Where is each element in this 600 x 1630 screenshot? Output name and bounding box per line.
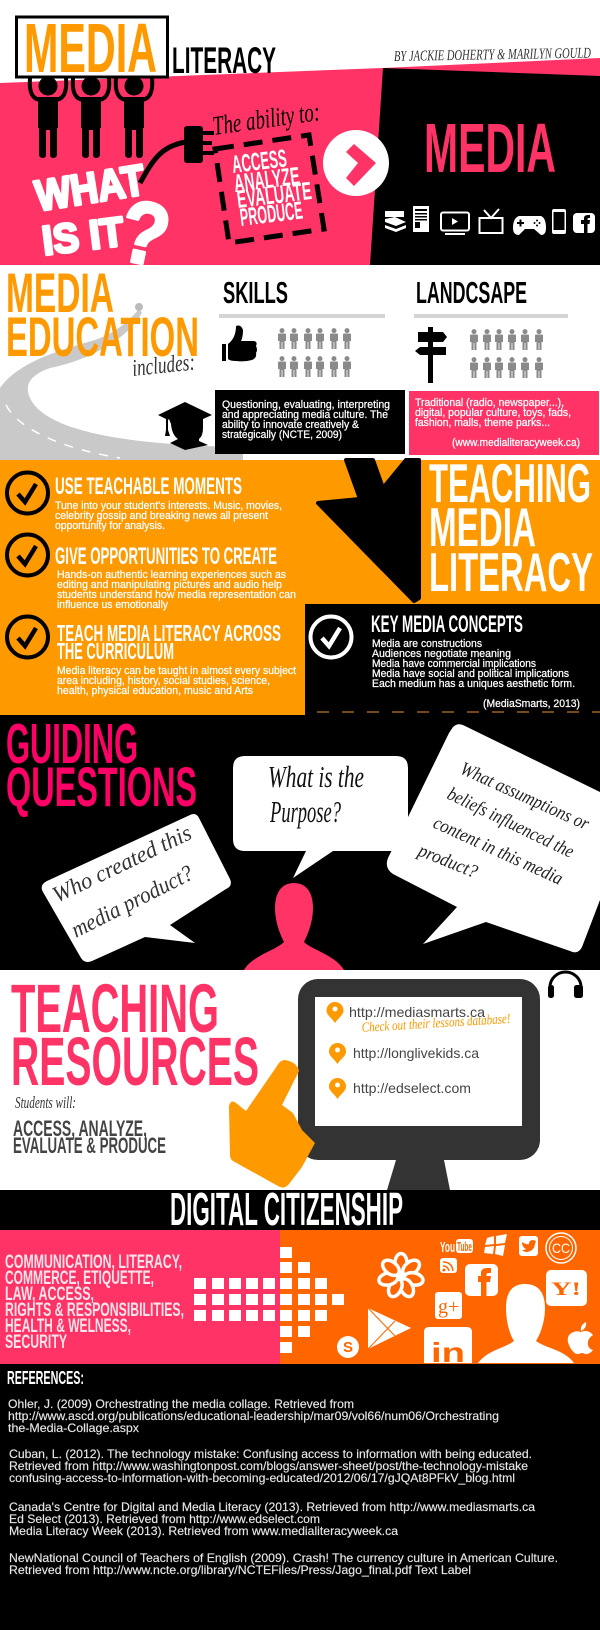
- reference: Cuban: Retrieved from http://www.washingtonpost.com/blogs/answer-sheet/post/the-technology-mistake: [9, 1459, 528, 1473]
- tip: opportunities to create: editing and manipulating pictures and audio help: [57, 579, 282, 591]
- icon: windows: [484, 1234, 507, 1256]
- panel: media education: [0, 261, 600, 460]
- black media panel: [370, 68, 600, 265]
- text box: skills: ability to innovate creatively &: [222, 419, 360, 431]
- text box: skills: strategically (NCTE, 2009): [222, 429, 342, 441]
- panel: key media concepts: (MediaSmarts, 2013): [483, 698, 580, 710]
- tip: opportunities to create: influence us emotionally: [57, 599, 168, 611]
- reference: NCTE: Retrieved from http://www.ncte.org/library/NCTEFiles/Press/Jago_final.pdf Text Label: [9, 1563, 471, 1577]
- panel: teaching resources: [0, 970, 600, 1190]
- icon: landscape people: [470, 329, 543, 378]
- heading: what is it: WHAT: [32, 156, 148, 221]
- heading: media education: [6, 261, 199, 368]
- title: literacy: LITERACY: [172, 40, 276, 81]
- speech bubble: purpose: Purpose?: [269, 794, 341, 829]
- icon: check 1: [7, 472, 48, 514]
- panel: key media concepts: [305, 604, 600, 715]
- text box: landscape: (www.medialiteracyweek.ca): [452, 437, 580, 449]
- heading: teaching media literacy: [429, 452, 593, 603]
- resource links: http://edselect.com: [353, 1080, 471, 1096]
- text: the ability to: The ability to:: [211, 96, 322, 141]
- text: elements list: RIGHTS & RESPONSIBILITIES,: [5, 1300, 184, 1321]
- heading: guiding questions: QUESTIONS: [6, 755, 197, 818]
- reference: Ohler: http://www.ascd.org/publications/educational-leadership/mar09/vol66/num06/Orchestrating: [8, 1409, 499, 1423]
- reference: Cuban: confusing-access-to-information-with-becoming-educated/2012/06/17/gJQAt8PFkV_blog.html: [9, 1471, 515, 1485]
- title: media box: [16, 9, 168, 87]
- road illustration: [0, 303, 243, 460]
- text: includes: includes:: [131, 350, 196, 382]
- reference: Canada and others: [9, 1500, 535, 1538]
- reference: Cuban: [9, 1447, 532, 1485]
- reference: Ohler: [8, 1397, 499, 1435]
- orange panel: [280, 1230, 600, 1364]
- icon: plug and cable: [140, 126, 214, 183]
- speech bubble: assumptions: [387, 724, 600, 952]
- tip: opportunities to create: GIVE OPPORTUNITIES TO CREATE: [55, 543, 277, 570]
- heading: teaching resources: RESOURCES: [11, 1023, 259, 1100]
- text: access analyze evaluate produce: ACCESS, ANALYZE,: [13, 1116, 147, 1141]
- speech bubble: assumptions: product?: [413, 839, 481, 883]
- dashed frame with verbs: EVALUATE: [235, 177, 313, 214]
- text: elements list: COMMERCE, ETIQUETTE,: [5, 1268, 154, 1289]
- panel: header: [0, 0, 600, 287]
- tip: opportunities to create: students understand how media representation can: [57, 589, 296, 601]
- icon: google plus: [435, 1292, 462, 1319]
- icon: signpost: [415, 327, 447, 383]
- icon: headphones: [548, 972, 583, 998]
- dashed frame with verbs: [215, 135, 324, 243]
- panel: references: [7, 1368, 558, 1577]
- text box: skills: and appreciating media culture. The: [222, 409, 388, 421]
- icon: rss: [440, 1258, 457, 1273]
- icon: pointing hand: [229, 1060, 315, 1188]
- icon: pink person: [244, 883, 344, 970]
- reference: Ohler: the-Media-Collage.aspx: [8, 1421, 139, 1435]
- icon: skype: [337, 1336, 359, 1358]
- text box: landscape: Traditional (radio, newspaper...),: [415, 397, 564, 409]
- reference: Canada and others: Canada's Centre for Digital and Media Literacy (2013). Retrieved from http://www.mediasmarts.ca: [9, 1500, 535, 1514]
- heading: references: REFERENCES:: [7, 1368, 84, 1388]
- text: elements list: [5, 1252, 184, 1353]
- icon: icq flower: [378, 1254, 424, 1299]
- text: students will: Students will:: [15, 1093, 76, 1112]
- arrow: [318, 460, 419, 601]
- icon: white check: [310, 616, 352, 658]
- icon row: media types: [385, 206, 595, 235]
- pink panel: [0, 1230, 280, 1364]
- tip: opportunities to create: Hands-on authentic learning experiences such as: [57, 569, 286, 581]
- icon: graduate: [158, 402, 212, 450]
- panel: key media concepts: Media have social and political implications: [372, 668, 569, 680]
- icon: yahoo: [546, 1270, 587, 1306]
- icon: youtube: You: [440, 1239, 455, 1256]
- arrow of squares: [194, 1247, 344, 1353]
- icon: twitter: [519, 1236, 538, 1256]
- panel: teaching media literacy: [0, 452, 600, 715]
- heading: guiding questions: [6, 712, 197, 818]
- text: access analyze evaluate produce: [13, 1116, 166, 1158]
- tip: across the curriculum: THE CURRICULUM: [57, 638, 174, 664]
- text: elements list: SECURITY: [5, 1332, 67, 1353]
- icon: yahoo: Y!: [551, 1279, 581, 1300]
- title: media box: MEDIA: [24, 9, 157, 87]
- icon: check 3: [7, 616, 48, 658]
- icon: linkedin: in: [431, 1337, 465, 1368]
- heading: media education: EDUCATION: [6, 305, 199, 368]
- heading: media education: MEDIA: [6, 261, 114, 324]
- icon: arrow circle: [323, 130, 389, 196]
- icon: youtube: Tube: [457, 1239, 472, 1254]
- text: elements list: HEALTH & WELNESS,: [5, 1316, 131, 1337]
- reference: Cuban: Cuban, L. (2012). The technology mistake: Confusing access to information with being educated.: [9, 1447, 532, 1461]
- tip: across the curriculum: area including, history, social studies, science,: [57, 675, 270, 687]
- icon: apple: [568, 1322, 593, 1354]
- icon: pin 2: [329, 1043, 346, 1064]
- resource links: [326, 1002, 511, 1099]
- speech bubble: assumptions: content in this media: [430, 812, 566, 890]
- icon: skills people: [278, 328, 351, 377]
- icon: pin 1: [326, 1002, 344, 1023]
- tip: teachable moments: [7, 472, 282, 532]
- pink band: [0, 58, 600, 265]
- dashed frame with verbs: ANALYZE: [232, 162, 301, 198]
- icon: linkedin: [424, 1327, 472, 1368]
- text box: landscape: [409, 391, 599, 455]
- icon: skype: S: [343, 1339, 353, 1356]
- text: elements list: LAW, ACCESS,: [5, 1284, 94, 1305]
- text box: skills: Questioning, evaluating, interpreting: [222, 399, 390, 411]
- panel: key media concepts: Each medium has a uniques aesthetic form.: [372, 678, 575, 690]
- heading: skills: SKILLS: [223, 275, 288, 310]
- tip: teachable moments: celebrity gossip and breaking news all present: [55, 510, 268, 522]
- text: elements list: COMMUNICATION, LITERACY,: [5, 1252, 182, 1273]
- resource links: http://mediasmarts.ca: [349, 1004, 485, 1020]
- reference: Canada and others: Ed Select (2013). Retrieved from http://www.edselect.com: [9, 1512, 320, 1526]
- tip: teachable moments: USE TEACHABLE MOMENTS: [55, 473, 242, 500]
- speech bubble: purpose: What is the: [268, 759, 364, 794]
- speech bubble: who created: media product?: [67, 860, 197, 942]
- tip: across the curriculum: TEACH MEDIA LITERACY ACROSS: [57, 620, 281, 646]
- reference: Ohler: Ohler, J. (2009) Orchestrating the media collage. Retrieved from: [8, 1397, 354, 1411]
- heading: what is it: IS IT: [39, 208, 126, 264]
- heading: teaching resources: TEACHING: [11, 970, 219, 1047]
- text box: landscape: digital, popular culture, toys, fads,: [415, 407, 571, 419]
- text box: landscape: fashion, malls, theme parks...: [415, 417, 550, 429]
- tip: across the curriculum: Media literacy can be taught in almost every subject: [57, 665, 296, 677]
- heading: teaching resources: [11, 970, 259, 1100]
- reference: NCTE: NewNational Council of Teachers of English (2009). Crash! The currency culture in American Culture.: [9, 1551, 558, 1565]
- panel: key media concepts: Media have commercial implications: [372, 658, 536, 670]
- annotation: Check out their lessons database!: [361, 1012, 511, 1036]
- panel: key media concepts: Audiences negotiate meaning: [372, 648, 511, 660]
- icon: facebook: [465, 1264, 498, 1296]
- speech bubble: who created: Who created this: [48, 820, 195, 908]
- heading: guiding questions: GUIDING: [6, 712, 138, 776]
- speech bubble: assumptions: beliefs influenced the: [444, 784, 577, 863]
- icon: thumbs up: [222, 326, 257, 361]
- speech bubble: purpose: [233, 756, 408, 878]
- tip: teachable moments: opportunity for analysis.: [55, 520, 165, 532]
- icon: monitor: [298, 979, 540, 1190]
- icon: creative commons: [546, 1233, 576, 1263]
- icon: play store: [368, 1308, 411, 1349]
- text: access analyze evaluate produce: EVALUATE & PRODUCE: [13, 1133, 166, 1158]
- icon: google plus: g+: [438, 1296, 459, 1318]
- tip: opportunities to create: [7, 534, 296, 611]
- dashed frame with verbs: ACCESS: [230, 144, 288, 179]
- heading: what is it: [32, 156, 179, 287]
- icon: three people: [30, 76, 152, 158]
- tip: teachable moments: Tune into your student's interests. Music, movies,: [55, 500, 282, 512]
- icon: person: [478, 1284, 574, 1363]
- panel: key media concepts: Media are constructions: [372, 638, 482, 650]
- dashed frame with verbs: PRODUCE: [238, 196, 304, 232]
- heading: what is it: ?: [111, 180, 179, 287]
- icon: creative commons: CC: [552, 1240, 570, 1256]
- tip: across the curriculum: [7, 616, 296, 697]
- panel: guiding questions: [0, 712, 600, 970]
- reference: Canada and others: Media Literacy Week (2013). Retrieved from www.medialiteracyweek.ca: [9, 1524, 398, 1538]
- icon: pin 3: [329, 1078, 346, 1099]
- speech bubble: who created: [42, 814, 231, 962]
- reference: NCTE: [9, 1551, 558, 1577]
- resource links: http://longlivekids.ca: [353, 1045, 479, 1061]
- tip: across the curriculum: health, physical education, music and Arts: [57, 685, 253, 697]
- panel: digital citizenship: [0, 1183, 600, 1368]
- text box: skills: [215, 390, 405, 454]
- icon: check 2: [7, 534, 48, 576]
